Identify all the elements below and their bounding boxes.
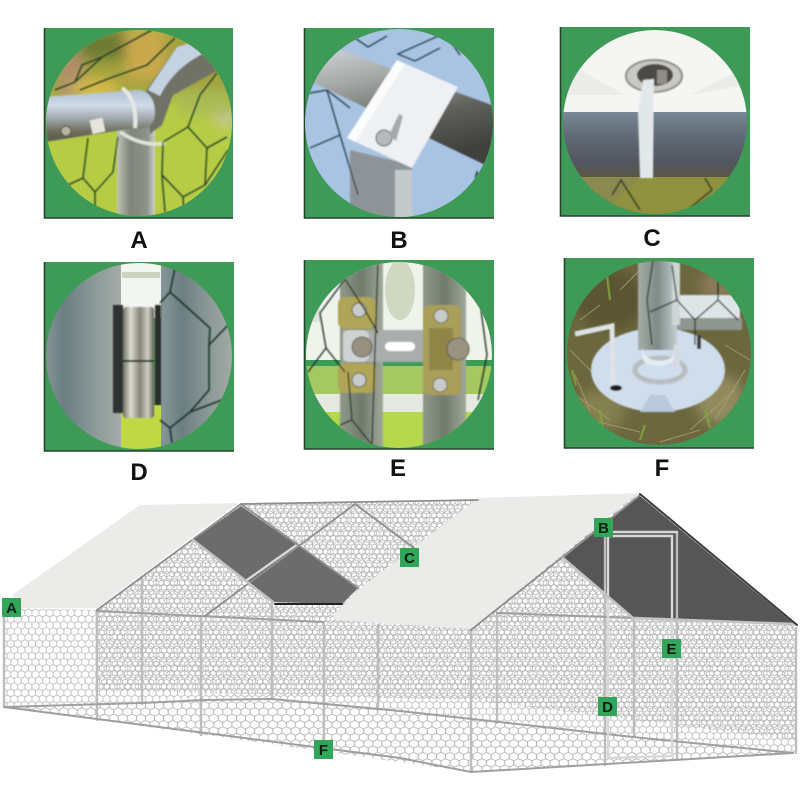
marker E: E — [666, 641, 677, 658]
shade panel: right rear roof — [563, 496, 793, 623]
panel A: roof corner joint with cable tie — [40, 25, 240, 225]
label D: D — [130, 459, 148, 486]
white roof cover: right — [333, 493, 638, 629]
panel B: door bracket and bolt — [300, 25, 500, 225]
label F: F — [655, 455, 669, 482]
marker B — [594, 518, 613, 537]
label C: C — [643, 225, 661, 252]
marker C — [400, 548, 419, 567]
marker D: D — [602, 699, 613, 716]
chicken coop illustration — [2, 493, 797, 772]
marker A — [2, 598, 21, 617]
panel D: door hinge — [40, 258, 238, 458]
wire mesh walls and floor — [4, 495, 796, 772]
label B: B — [390, 227, 408, 254]
marker F — [314, 740, 333, 759]
marker C: C — [404, 550, 415, 567]
white roof cover: left — [12, 503, 238, 608]
panel F: ground plate and peg — [560, 255, 760, 455]
label E: E — [390, 455, 406, 482]
steel frame — [4, 494, 797, 772]
panel E: door latch — [300, 255, 500, 455]
marker D — [598, 697, 617, 716]
shade panel: left rear roof — [193, 506, 358, 604]
marker F: F — [319, 742, 328, 759]
marker B: B — [598, 520, 609, 537]
label A: A — [130, 227, 148, 254]
marker A: A — [6, 600, 17, 617]
panel C: roof grommet tied to tube — [555, 25, 755, 222]
marker E — [662, 639, 681, 658]
